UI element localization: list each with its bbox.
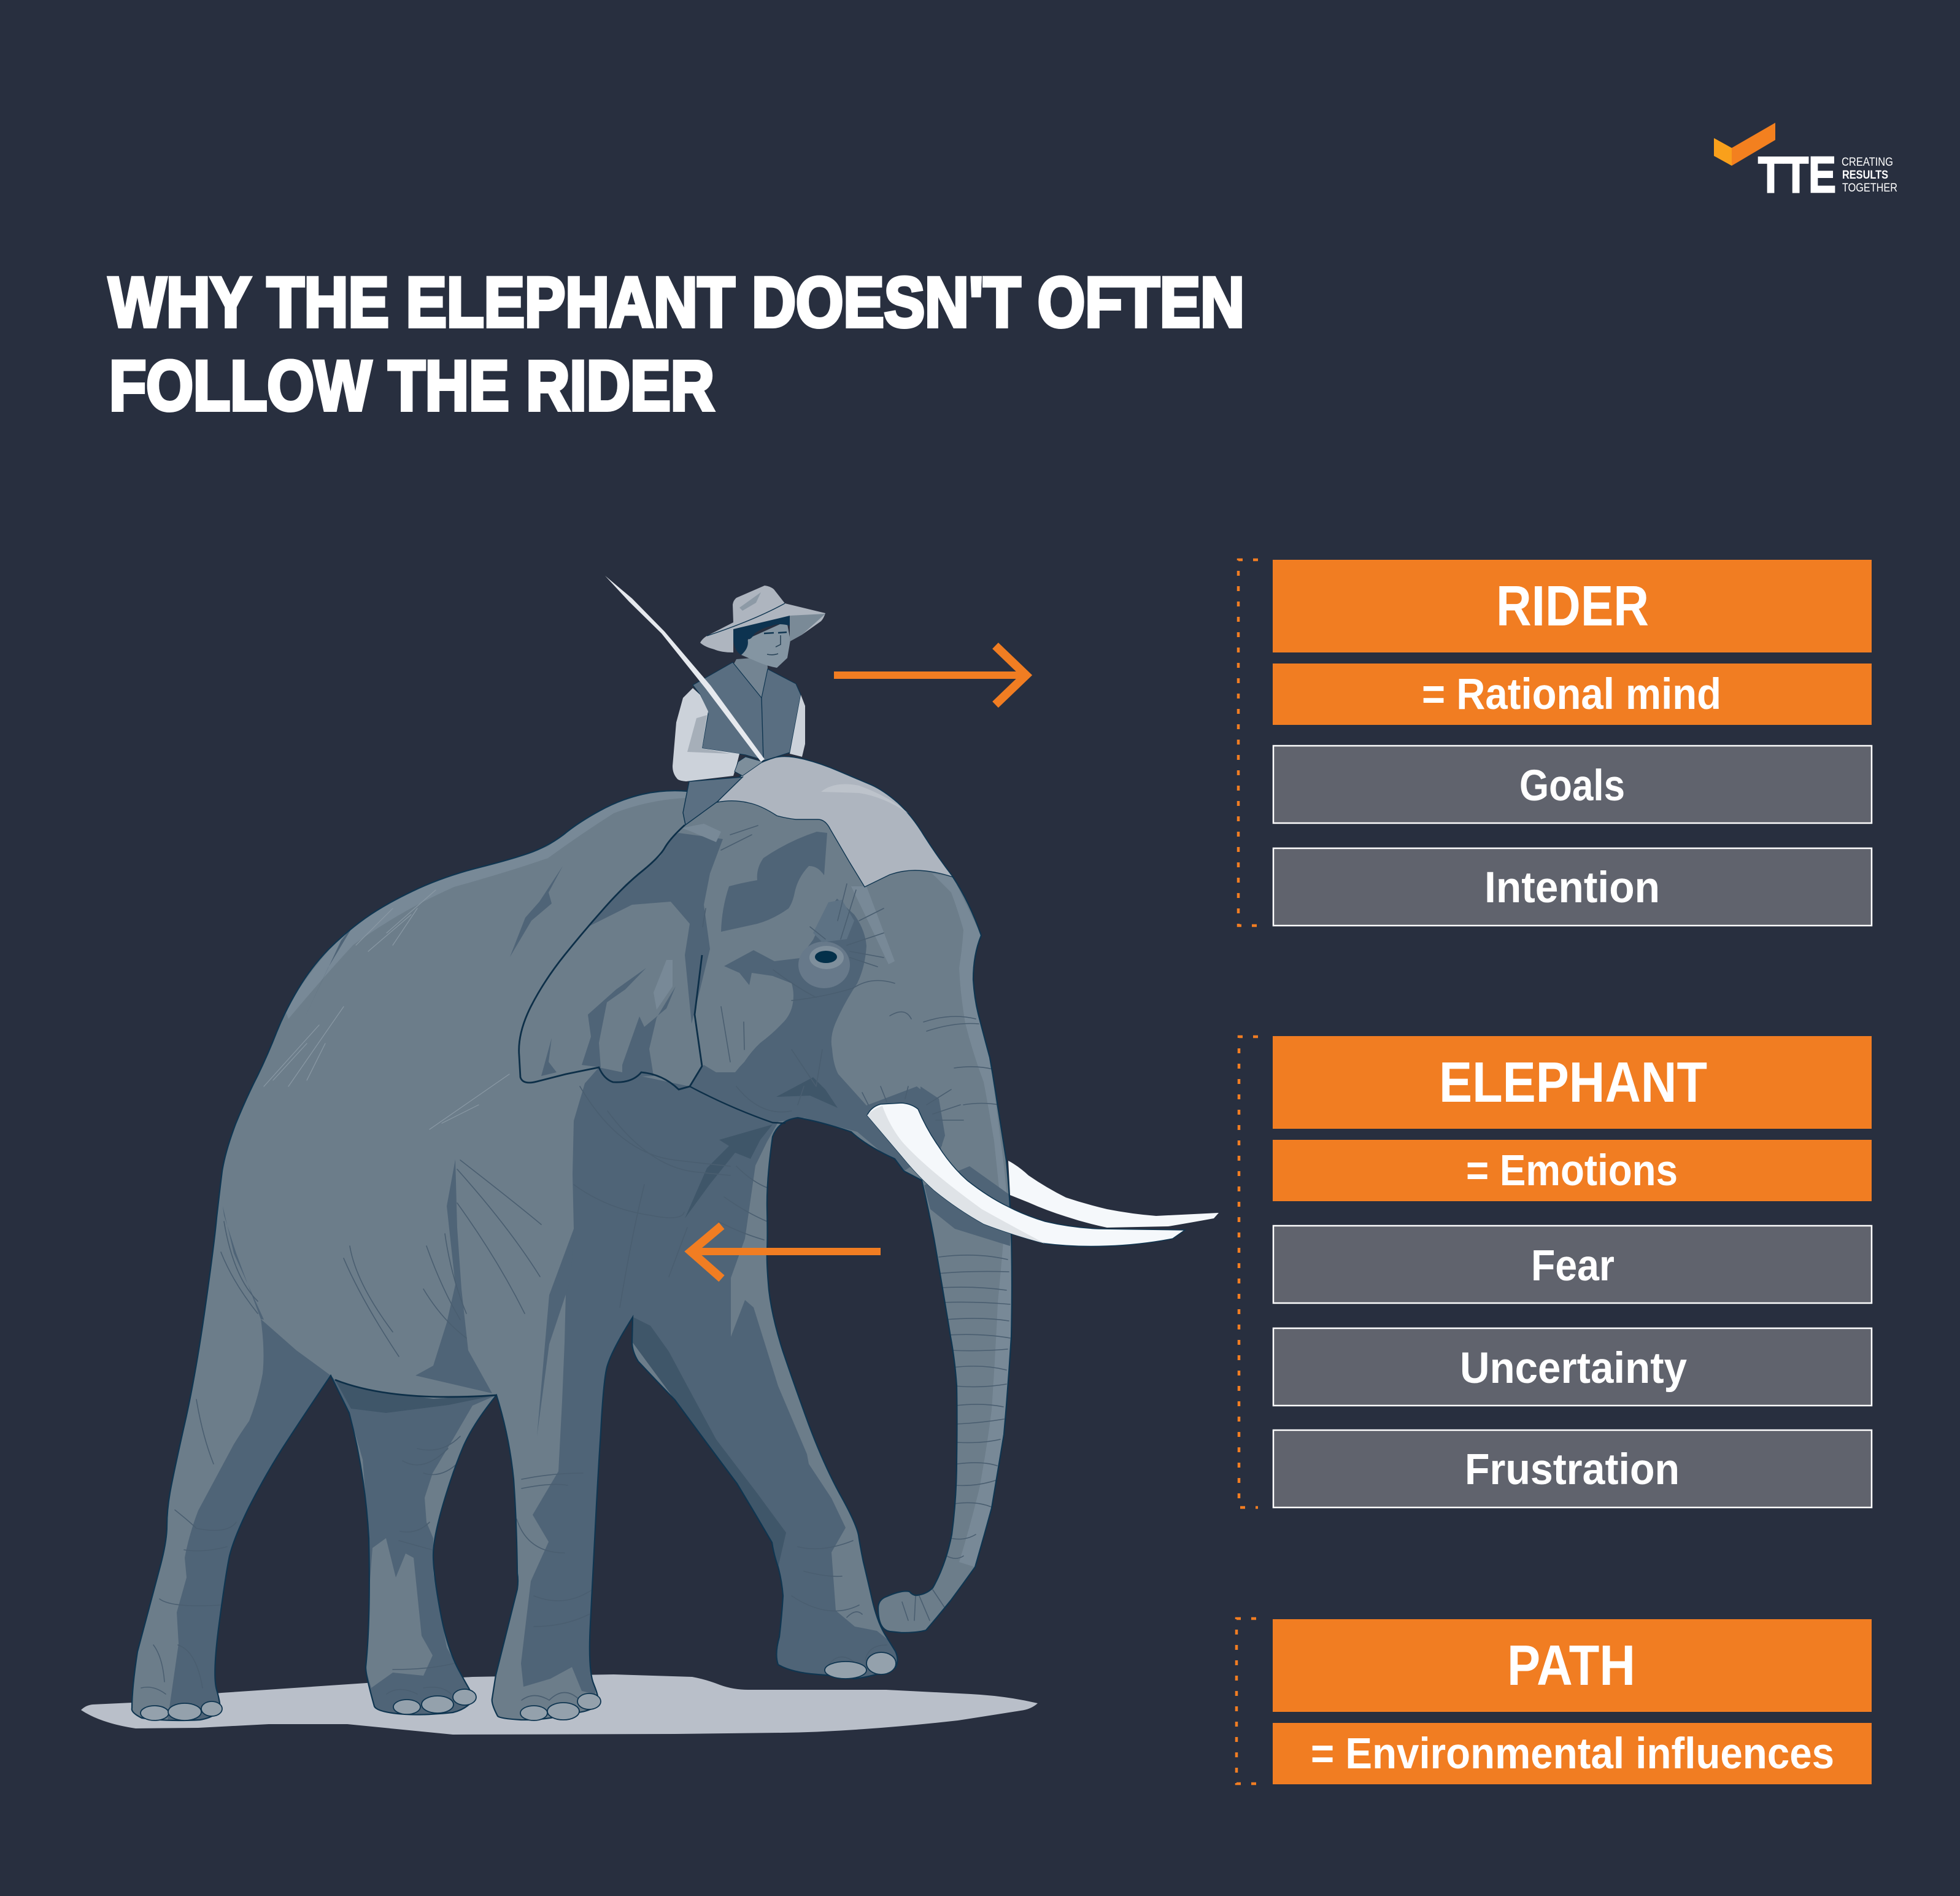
rider vest: [693, 662, 801, 760]
panel: rider: [1238, 560, 1872, 926]
illustration: rider: [605, 576, 825, 825]
item: frustration: [1273, 1430, 1872, 1507]
chest and foreleg shadow: [521, 1067, 902, 1694]
rough skin highlights: [264, 890, 509, 1129]
item: goals: Goals: [1519, 762, 1625, 810]
subheading: emotions: = Emotions: [1466, 1147, 1678, 1195]
vest seam: [762, 698, 763, 760]
ear dark top: [588, 833, 723, 1024]
logo tagline: CREATING: [1842, 156, 1893, 169]
icon: orange check mark: [1714, 123, 1775, 166]
belly fold line: [335, 1380, 496, 1397]
bracket: [1238, 560, 1258, 926]
subheading: rational mind: [1273, 664, 1872, 725]
rider leg: [683, 777, 743, 825]
far tusk: [1008, 1161, 1219, 1228]
brow highlight: [851, 886, 895, 964]
title: WHY THE ELEPHANT DOESN'T OFTEN: [109, 263, 1244, 342]
item: uncertainty: Uncertainty: [1460, 1344, 1687, 1393]
title: FOLLOW THE RIDER: [109, 347, 714, 425]
heading: RIDER: RIDER: [1496, 574, 1649, 638]
logo wordmark: TTE: [1758, 146, 1836, 203]
logo: TTE: [1714, 123, 1897, 203]
armpit dark wedge: [685, 1124, 773, 1218]
subheading: emotions: [1273, 1140, 1872, 1201]
skin wrinkles: [141, 826, 1010, 1700]
elephant outline: [132, 757, 1012, 1720]
heading: PATH: PATH: [1507, 1633, 1635, 1697]
rider stick: [605, 576, 765, 762]
foreleg dark wedge: [537, 1229, 574, 1436]
rider hand: [735, 757, 763, 776]
illustration: elephant: [132, 757, 1219, 1725]
logo tagline: [1842, 156, 1897, 195]
item: intention: [1273, 848, 1872, 926]
far hind leg light band: [425, 1395, 496, 1538]
ear folds: [582, 968, 646, 1067]
rider hat: [700, 586, 825, 652]
item: goals: [1273, 746, 1872, 823]
item: uncertainty: [1273, 1328, 1872, 1406]
rider right sleeve: [790, 695, 805, 757]
head shadow behind tusk: [920, 1086, 945, 1154]
neck fold line: [690, 1086, 785, 1123]
stepping leg dark edge: [632, 1317, 786, 1567]
far hind leg light foot: [362, 1538, 433, 1688]
heading: PATH: [1273, 1619, 1872, 1712]
elephant body silhouette: [132, 757, 1012, 1720]
heading: ELEPHANT: [1273, 1036, 1872, 1129]
body streaks: [510, 866, 563, 957]
bracket: [1239, 1037, 1258, 1507]
rider hair: [733, 615, 791, 655]
forehead patch: [721, 832, 827, 932]
ear outline: [519, 825, 702, 1089]
near hind leg shadow: [167, 1319, 331, 1725]
trunk highlight: [932, 873, 1011, 1567]
ground shadow: [81, 1674, 1038, 1735]
rider neck: [733, 657, 768, 698]
item: frustration: Frustration: [1465, 1445, 1680, 1494]
rider left sleeve: [673, 688, 739, 781]
bracket: [1237, 1619, 1256, 1784]
panel: path: [1237, 1619, 1872, 1784]
subheading: environmental influences: = Environmental influences: [1311, 1730, 1834, 1778]
logo tagline: RESULTS: [1842, 169, 1888, 182]
far hind leg dark strip: [335, 1380, 496, 1413]
back highlight: [285, 789, 688, 1019]
subheading: rational mind: = Rational mind: [1422, 670, 1721, 719]
panel: elephant: [1239, 1036, 1872, 1507]
item: intention: Intention: [1484, 864, 1660, 912]
belly wedge: [415, 1159, 492, 1393]
far hind leg shadow: [331, 1376, 496, 1716]
headcloth: [717, 757, 953, 887]
item: fear: [1273, 1226, 1872, 1303]
heading: RIDER: [1273, 560, 1872, 652]
elephant shading: [141, 789, 1013, 1725]
heading: ELEPHANT: ELEPHANT: [1439, 1050, 1707, 1114]
near tusk: [867, 1103, 1185, 1246]
cheek and mouth shadow: [690, 899, 943, 1171]
item: fear: Fear: [1531, 1242, 1615, 1290]
logo tagline: TOGETHER: [1842, 182, 1897, 195]
rider face: [741, 621, 790, 668]
trunk shadow under tusk: [924, 1166, 1013, 1246]
icon: eye: [809, 946, 844, 969]
title: [109, 263, 1244, 425]
toenails: [141, 1652, 896, 1720]
arrow: rider moves right: [834, 646, 1026, 705]
arrow: elephant moves left: [691, 1226, 881, 1279]
eye socket: [798, 942, 850, 988]
rump streak: [223, 1206, 264, 1320]
